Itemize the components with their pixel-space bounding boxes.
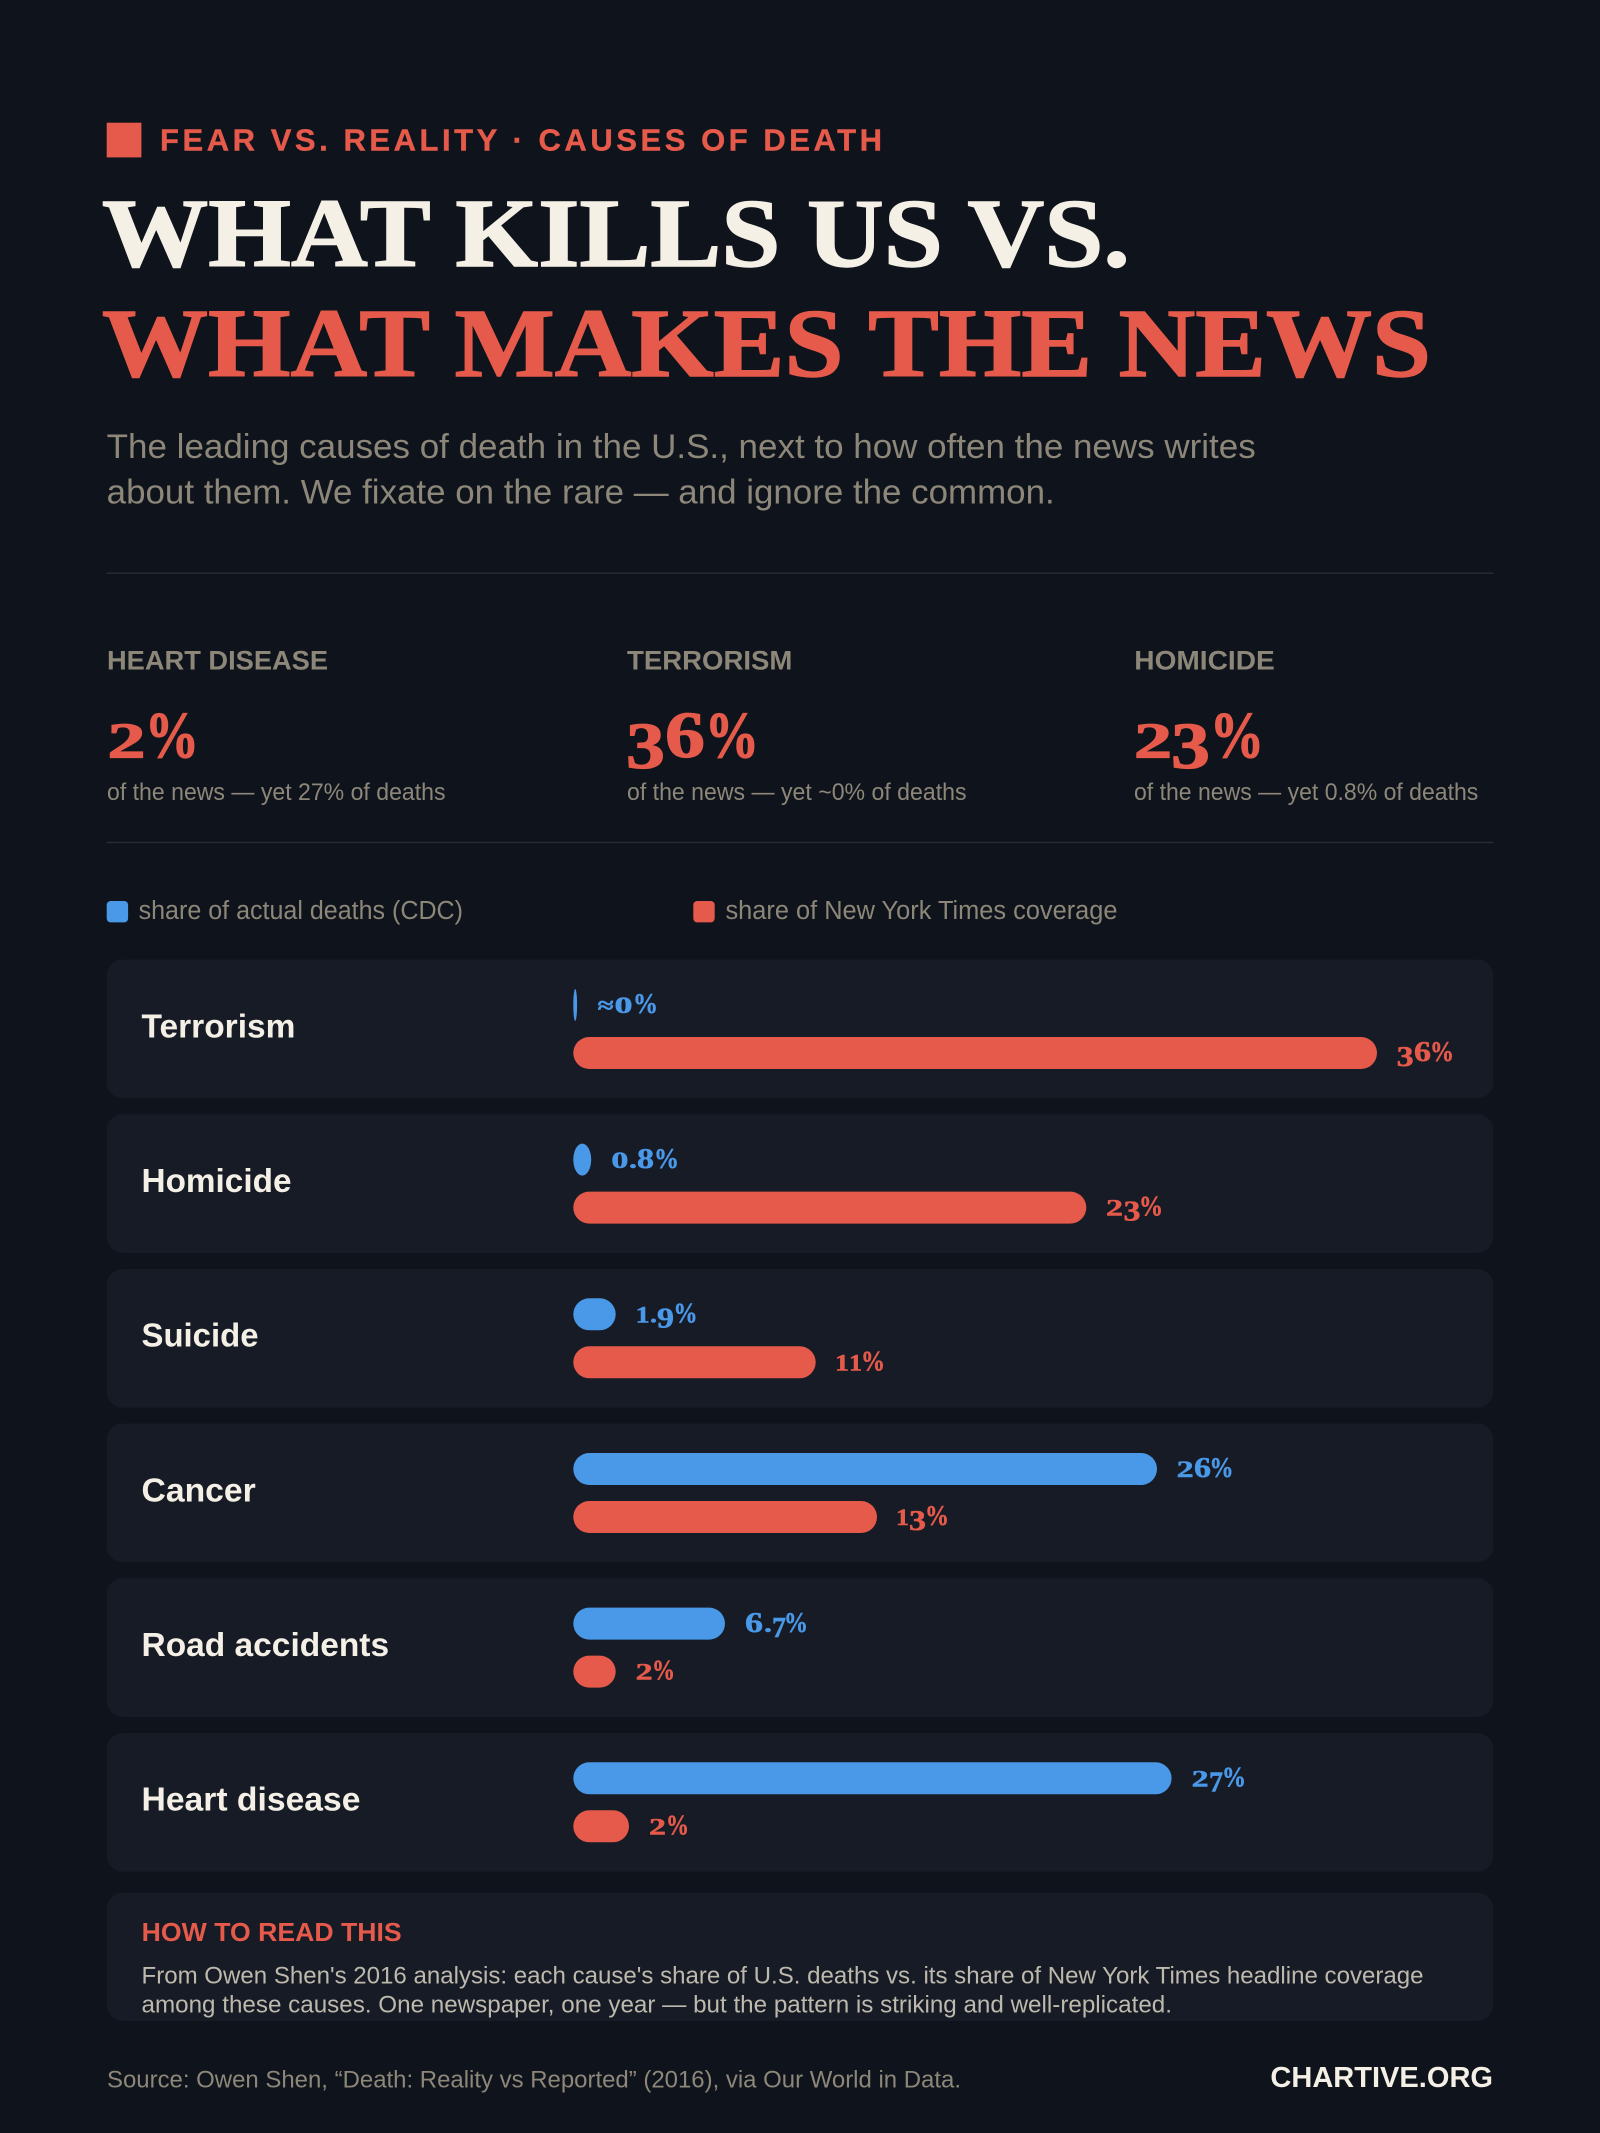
value: road deaths: %	[784, 1608, 808, 1639]
row: cancer	[107, 1424, 1493, 1562]
value: cancer deaths: %	[1210, 1453, 1234, 1484]
callout: how to read this: From Owen Shen's 2016 analysis: each cause's share of U.S. deaths vs. its share of New York Times headline coverage	[142, 1962, 1424, 1989]
source: Source: Owen Shen, “Death: Reality vs Reported” (2016), via Our World in Data.	[107, 2066, 961, 2093]
value: terrorism deaths: %	[633, 989, 658, 1020]
bar: suicide deaths	[573, 1298, 616, 1330]
value: homicide coverage: 3	[1124, 1197, 1140, 1228]
value: suicide coverage: 1	[835, 1350, 849, 1375]
value: terrorism deaths: ≈	[598, 993, 614, 1018]
bar: cancer deaths	[573, 1453, 1157, 1485]
value: terrorism coverage: 6	[1414, 1037, 1431, 1068]
callout: how to read this	[107, 1893, 1493, 2021]
bar chart	[107, 960, 1493, 1872]
stat: homicide: %	[1210, 699, 1264, 772]
value: road coverage: %	[652, 1656, 675, 1687]
bar: heart deaths	[573, 1762, 1172, 1794]
value: road coverage: 2	[636, 1660, 653, 1685]
title line 1: WHAT KILLS US VS.	[102, 180, 1130, 287]
brand: CHARTIVE.ORG	[1270, 2062, 1493, 2094]
stat: heart disease: HEART DISEASE	[107, 645, 328, 675]
row: homicide	[107, 1114, 1493, 1253]
bar: road coverage	[573, 1656, 616, 1688]
value: homicide deaths: 8	[637, 1144, 654, 1175]
value: homicide deaths: 0	[611, 1148, 628, 1173]
row: suicide	[107, 1269, 1493, 1408]
row: cancer: Cancer	[142, 1471, 256, 1508]
value: cancer deaths: 6	[1194, 1453, 1211, 1484]
stat: terrorism: of the news — yet ~0% of deaths	[627, 779, 966, 806]
stat: terrorism	[626, 645, 966, 806]
callout: how to read this: HOW TO READ THIS	[142, 1917, 402, 1947]
stat: heart disease: %	[145, 699, 199, 772]
value: homicide coverage: 2	[1106, 1196, 1123, 1221]
value: suicide deaths: %	[674, 1298, 698, 1330]
title	[102, 180, 1431, 397]
value: suicide deaths: .	[650, 1302, 657, 1328]
subtitle	[107, 428, 1256, 512]
bar: heart coverage	[573, 1810, 629, 1842]
stat: heart disease	[107, 645, 446, 806]
row: terrorism	[107, 960, 1493, 1098]
value: heart deaths: %	[1222, 1762, 1246, 1794]
title line 2: WHAT MAKES THE NEWS	[102, 290, 1431, 397]
row: road accidents: Road accidents	[142, 1626, 389, 1663]
stat: homicide	[1134, 645, 1478, 806]
value: road deaths: 7	[772, 1613, 786, 1644]
value: suicide deaths: 1	[636, 1302, 650, 1328]
bar: road deaths	[573, 1608, 725, 1640]
value: road deaths: 6	[745, 1608, 763, 1639]
legend	[107, 897, 1117, 925]
value: homicide coverage: %	[1139, 1192, 1163, 1223]
footer	[107, 2062, 1493, 2094]
value: heart coverage: 2	[649, 1814, 666, 1839]
bar: homicide coverage	[573, 1192, 1086, 1224]
value: homicide deaths: %	[654, 1144, 679, 1175]
bar: homicide deaths	[573, 1144, 591, 1176]
value: suicide deaths: 9	[657, 1304, 674, 1334]
stat: terrorism: TERRORISM	[627, 645, 792, 675]
subtitle: The leading causes of death in the U.S., next to how often the news writes	[107, 428, 1256, 466]
stat: homicide: HOMICIDE	[1134, 645, 1275, 675]
header	[102, 123, 1431, 511]
value: cancer deaths: 2	[1177, 1457, 1194, 1482]
eyebrow	[107, 123, 882, 158]
value: suicide coverage: 1	[849, 1350, 862, 1375]
legend: deaths: share of actual deaths (CDC)	[139, 897, 463, 925]
value: cancer coverage: 3	[909, 1506, 926, 1537]
value: heart deaths: 7	[1209, 1768, 1223, 1798]
stat: heart disease: 2	[108, 712, 146, 768]
row: terrorism: Terrorism	[142, 1008, 296, 1044]
row: homicide: Homicide	[142, 1162, 292, 1199]
stat: heart disease: of the news — yet 27% of deaths	[107, 779, 446, 806]
bar: terrorism coverage	[573, 1037, 1377, 1069]
value: terrorism coverage: 3	[1397, 1042, 1414, 1073]
value: terrorism deaths: 0	[614, 993, 632, 1018]
stat: terrorism: 3	[626, 710, 665, 783]
bar: cancer coverage	[573, 1501, 877, 1533]
value: cancer coverage: 1	[896, 1505, 909, 1530]
stat: homicide: 3	[1171, 710, 1210, 783]
eyebrow text: FEAR VS. REALITY · CAUSES OF DEATH	[160, 123, 882, 158]
value: suicide coverage: %	[861, 1346, 885, 1377]
bar: suicide coverage	[573, 1346, 816, 1378]
value: terrorism coverage: %	[1430, 1037, 1454, 1068]
stat: terrorism: 6	[665, 699, 705, 772]
stats strip	[107, 645, 1478, 806]
value: road deaths: .	[764, 1612, 772, 1637]
icon: red square	[107, 123, 141, 157]
bar: terrorism deaths	[573, 989, 577, 1021]
row: road accidents	[107, 1578, 1493, 1717]
row: suicide: Suicide	[142, 1317, 258, 1354]
stat: homicide: 2	[1134, 712, 1172, 768]
value: heart coverage: %	[666, 1810, 689, 1841]
value: cancer coverage: %	[925, 1501, 949, 1532]
row: heart disease	[107, 1733, 1493, 1872]
value: heart deaths: 2	[1192, 1766, 1209, 1792]
value: homicide deaths: .	[629, 1148, 637, 1173]
callout: how to read this: among these causes. One newspaper, one year — but the pattern is striking and well-replicated.	[142, 1992, 1172, 2019]
subtitle: about them. We fixate on the rare — and ignore the common.	[107, 474, 1055, 512]
stat: homicide: of the news — yet 0.8% of deaths	[1134, 779, 1478, 806]
legend: coverage: share of New York Times coverage	[726, 897, 1118, 925]
row: heart disease: Heart disease	[142, 1781, 360, 1818]
stat: terrorism: %	[705, 699, 759, 772]
